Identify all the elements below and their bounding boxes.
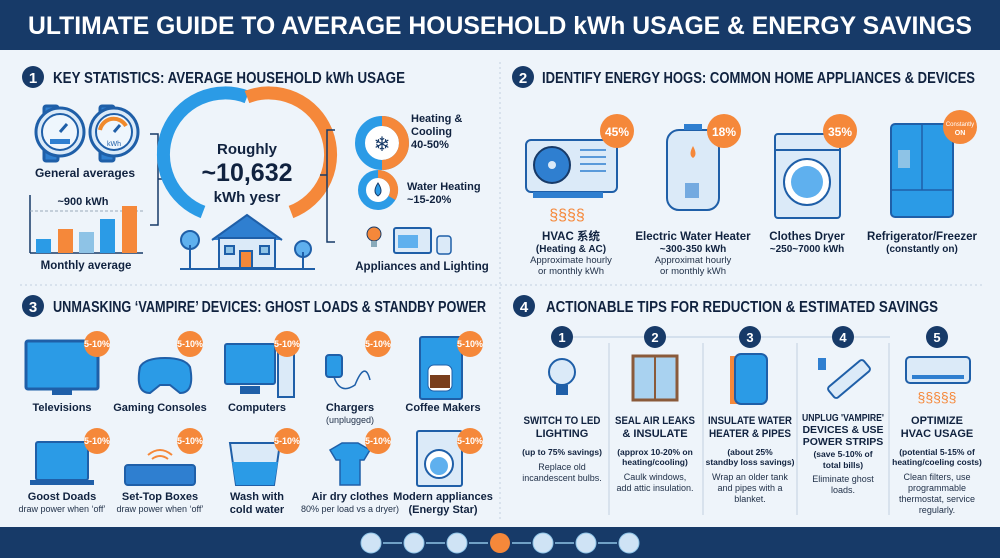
chart: annual usage arc: kWh yesr [214,189,281,206]
section 2 heading [512,66,975,88]
tip 3: insulate water heater: HEATER & PIPES [709,428,791,440]
tip 4: unplug vampire devices: (save 5-10% of [813,449,873,459]
donut: water heating [362,174,481,206]
donut: heating & cooling: Cooling [411,126,452,138]
vampire device grid [18,331,493,516]
tip 5: optimize HVAC: §§§§§ [918,389,956,405]
donut: water heating: ~15-20% [407,194,452,206]
donut: heating & cooling: Heating & [411,113,462,125]
tip 5: optimize HVAC: HVAC USAGE [901,428,973,440]
tip 1: LED lighting: Replace old [538,462,586,472]
bar chart: monthly average: ~900 kWh [57,196,109,208]
appliance: clothes dryer: ~250~7000 kWh [770,244,844,255]
tip 2: seal air leaks: Caulk windows, [624,472,686,482]
footer bar with icons [0,527,1000,558]
device: wash with cold water: 5-10% [274,436,300,446]
device: televisions: Televisions [32,402,92,414]
tip 2: seal air leaks: add attic insulation. [616,483,694,493]
appliance: HVAC: Approximate hourly [530,255,612,266]
appliance: HVAC: HVAC 系统 [542,229,600,243]
device: chargers: (unplugged) [326,415,374,425]
appliance: HVAC: §§§§ [549,207,585,224]
donut: water heating: Water Heating [407,181,481,193]
appliance: clothes dryer: 35% [828,125,852,139]
device: gaming consoles [113,331,207,414]
appliance: refrigerator [867,110,977,255]
device: set-top boxes: Set-Top Boxes [122,491,198,503]
tip 5: optimize HVAC: thermostat, service [899,494,975,504]
tips row [522,326,982,515]
appliance: water heater: or monthly kWh [660,266,726,277]
icons: appliances and lighting: Appliances and Lighting [355,261,489,273]
tip 4: unplug vampire devices: total bills) [823,460,863,470]
appliance: water heater: Approximat hourly [655,255,732,266]
tip 1: LED lighting: 1 [558,330,566,345]
appliance: HVAC: or monthly kWh [538,266,604,277]
tip 5: optimize HVAC: regularly. [919,505,955,515]
tip 4: unplug vampire devices: 4 [839,330,847,345]
section 3 heading: UNMASKING ‘VAMPIRE’ DEVICES: GHOST LOADS & STANDBY POWER [53,299,486,316]
device: air dry clothes: 5-10% [365,436,391,446]
chart: annual usage arc: Roughly [217,141,278,158]
section 4 heading: ACTIONABLE TIPS FOR REDUCTION & ESTIMATED SAVINGS [546,299,938,316]
device: modern appliances: (Energy Star) [408,504,478,516]
appliance: refrigerator: Constantly [946,122,974,128]
appliance: HVAC: 45% [605,125,629,139]
device: air dry clothes: Air dry clothes [311,491,389,503]
text: general averages: General averages [35,166,135,180]
icon: gauges [36,106,138,161]
tip 1: LED lighting: SWITCH TO LED [524,415,601,427]
appliance: HVAC [526,114,634,277]
tip 4: unplug vampire devices: loads. [831,485,855,495]
appliance: water heater: 18% [712,125,736,139]
tip 5: optimize HVAC: programmable [908,483,966,493]
device: televisions: 5-10% [84,339,110,349]
tip 1: LED lighting: LIGHTING [536,428,588,440]
tip 3: insulate water heater: and pipes with a [717,483,783,493]
appliance: refrigerator: ON [955,130,965,137]
tip 5: optimize HVAC: OPTIMIZE [911,415,963,427]
appliance: water heater [635,114,751,277]
device: televisions [26,331,110,414]
device: coffee makers: Coffee Makers [405,402,481,414]
tip 2: seal air leaks [615,326,695,493]
chart: annual usage arc: ~10,632 [201,159,293,187]
section 1 heading [22,66,405,88]
section 3 heading: 3 [29,299,37,316]
device: set-top boxes: draw power when ‘off’ [116,504,204,514]
device: set-top boxes: 5-10% [177,436,203,446]
icon: gauges: kWh [107,141,121,148]
tip 2: seal air leaks: & INSULATE [622,428,688,440]
device: chargers [326,331,391,425]
device: ghost loads laptop: Goost Doads [28,491,96,503]
bar chart: monthly average: Monthly average [41,260,131,272]
device: wash with cold water [230,428,300,516]
device: modern appliances: Modern appliances [393,491,493,503]
appliance: clothes dryer: Clothes Dryer [769,231,845,243]
tip 4: unplug vampire devices [802,326,884,495]
donut: heating & cooling: 40-50% [411,139,449,151]
tip 3: insulate water heater: (about 25% [727,447,773,457]
device: chargers: 5-10% [365,339,391,349]
tip 3: insulate water heater: Wrap an older tank [712,472,788,482]
device: ghost loads laptop: draw power when ‘off’ [18,504,106,514]
device: ghost loads laptop [18,428,110,514]
section 2 heading: 2 [519,70,527,87]
device: air dry clothes [301,428,399,514]
tip 2: seal air leaks: (approx 10-20% on [617,447,693,457]
device: computers: 5-10% [274,339,300,349]
device: air dry clothes: 80% per load vs a dryer) [301,504,399,514]
device: chargers: Chargers [326,402,374,414]
device: gaming consoles: 5-10% [177,339,203,349]
section 4 heading [513,295,938,317]
title bar: ULTIMATE GUIDE TO AVERAGE HOUSEHOLD kWh USAGE & ENERGY SAVINGS [28,12,972,40]
device: coffee makers [405,331,483,414]
appliance: refrigerator: (constantly on) [886,244,958,255]
appliance: water heater: Electric Water Heater [635,231,751,243]
tip 3: insulate water heater: 3 [746,330,754,345]
device: wash with cold water: Wash with [230,491,284,503]
appliance: refrigerator: Refrigerator/Freezer [867,231,977,243]
icon: house [180,215,315,269]
tip 3: insulate water heater: blanket. [734,494,766,504]
section 4 heading: 4 [520,299,529,316]
donut: heating & cooling: ❄ [374,134,390,156]
donut: heating & cooling [360,113,462,165]
section 1 heading: 1 [29,70,37,87]
device: computers: Computers [228,402,286,414]
tip 2: seal air leaks: 2 [651,330,659,345]
appliance: HVAC: (Heating & AC) [536,244,606,255]
appliance: clothes dryer [769,114,857,255]
device: modern appliances: 5-10% [457,436,483,446]
tip 1: LED lighting: incandescent bulbs. [522,473,602,483]
tip 5: optimize HVAC [892,326,982,515]
tip 5: optimize HVAC: (potential 5-15% of [899,447,975,457]
tip 5: optimize HVAC: heating/coeling costs) [892,457,982,467]
tip 4: unplug vampire devices: UNPLUG 'VAMPIRE' [802,413,884,424]
tip 2: seal air leaks: SEAL AIR LEAKS [615,415,695,427]
tip 2: seal air leaks: heating/cooling) [622,457,688,467]
device: gaming consoles: Gaming Consoles [113,402,207,414]
tip 5: optimize HVAC: Clean filters, use [903,472,971,482]
device: modern appliances [393,428,493,516]
tip 4: unplug vampire devices: DEVICES & USE [802,424,884,436]
chart: annual usage arc [163,93,331,212]
title bar [0,0,1000,50]
tip 1: LED lighting: (up to 75% savings) [522,447,602,457]
tip 5: optimize HVAC: 5 [933,330,941,345]
tip 3: insulate water heater [706,326,795,504]
tip 3: insulate water heater: INSULATE WATER [708,415,792,427]
icons: appliances and lighting [355,227,489,273]
tip 3: insulate water heater: standby loss savings) [706,457,795,467]
tip 1: LED lighting [522,326,602,483]
section 1 heading: KEY STATISTICS: AVERAGE HOUSEHOLD kWh USAGE [53,70,405,87]
device: computers [225,331,300,414]
tip 4: unplug vampire devices: POWER STRIPS [803,436,883,448]
tip 4: unplug vampire devices: Eliminate ghost [812,474,874,484]
bar chart: monthly average [30,195,143,272]
appliance: water heater: ~300-350 kWh [660,244,726,255]
device: set-top boxes [116,428,204,514]
device: wash with cold water: cold water [230,504,285,516]
device: coffee makers: 5-10% [457,339,483,349]
section 3 heading [22,295,486,317]
device: ghost loads laptop: 5-10% [84,436,110,446]
